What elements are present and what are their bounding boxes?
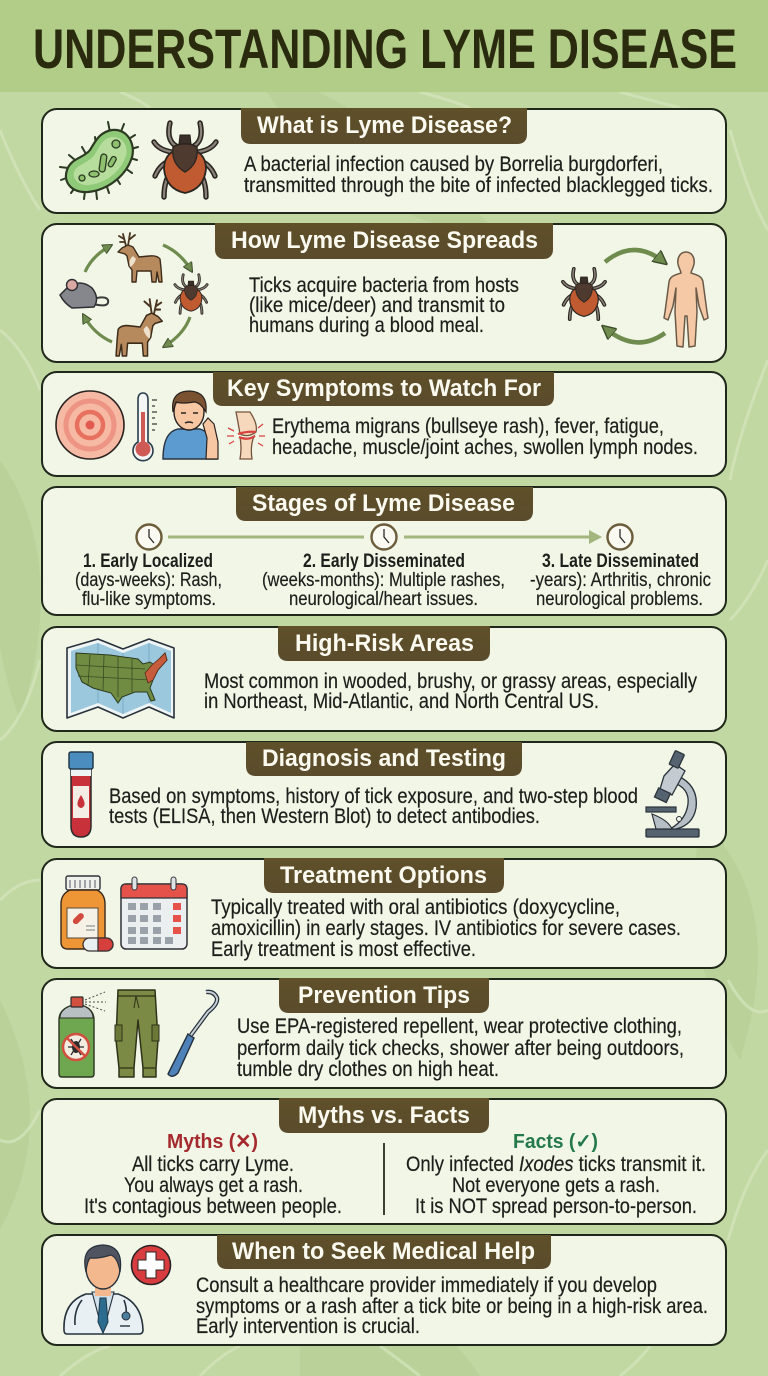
panel: Myths vs. Facts: [42, 1098, 726, 1224]
facts column: It is NOT spread person-to-person.: [415, 1195, 697, 1218]
text: transmission: (like mice/deer) and transmit to: [249, 294, 505, 317]
panel: What is Lyme Disease: [42, 108, 726, 213]
text: seek help: Early intervention is crucial.: [196, 1315, 420, 1338]
panel: How Lyme Disease Spreads: [42, 223, 726, 362]
icon: bullseye rash: [56, 391, 124, 459]
icon: clock 2: [372, 524, 396, 550]
heading pill: Prevention Tips: [298, 982, 470, 1009]
text: transmission: Ticks acquire bacteria from hosts: [249, 274, 519, 297]
title banner: [0, 0, 768, 92]
text: treatment: Typically treated with oral antibiotics (doxycycline,: [211, 896, 620, 919]
stage 3 text: -years): Arthritis, chronic: [530, 570, 711, 591]
text: seek help: Consult a healthcare provider immediately if you develop: [196, 1274, 657, 1297]
icon: medical cross: [132, 1246, 170, 1284]
panel: Treatment Options: [42, 858, 726, 968]
text: symptoms: [272, 415, 698, 459]
icon: person with headache: [163, 391, 218, 459]
heading pill: What is Lyme Disease?: [257, 112, 512, 139]
icon: deer bottom: [116, 299, 162, 356]
myths column: Myths (✕): [167, 1131, 258, 1153]
stage 2 text: neurological/heart issues.: [289, 589, 478, 610]
panel: Stages of Lyme Disease: [42, 487, 726, 615]
diagram: tick to human: [563, 250, 708, 347]
icon: tick: [154, 123, 216, 197]
icon: clock 1: [136, 524, 162, 550]
diagram: wildlife cycle: [60, 233, 207, 356]
icon: tick: [563, 269, 605, 319]
heading pill: High-Risk Areas: [295, 630, 474, 657]
arrows: exchange: [605, 250, 665, 342]
text: treatment: amoxicillin) in early stages. IV antibiotics for severe cases.: [211, 917, 681, 940]
myths column: It's contagious between people.: [84, 1195, 342, 1218]
icon: blood tube: [69, 752, 93, 837]
facts column: Not everyone gets a rash.: [452, 1174, 660, 1197]
icon: doctor: [64, 1245, 143, 1334]
text: prevention: Use EPA-registered repellent, wear protective clothing,: [237, 1015, 682, 1038]
text: definition: transmitted through the bite of infected blacklegged ticks.: [244, 174, 713, 197]
icon: cargo pants: [115, 990, 159, 1077]
panel: When to Seek Medical Help: [42, 1235, 726, 1345]
arrows: cycle: [84, 245, 191, 346]
heading pill: How Lyme Disease Spreads: [231, 227, 538, 254]
icon: tick remover tool: [168, 992, 217, 1076]
stage 3 text: neurological problems.: [536, 589, 703, 610]
panel: Prevention Tips: [42, 978, 726, 1088]
panel: Diagnosis and Testing: [42, 742, 726, 847]
divider: [383, 1143, 385, 1215]
icon: deer top: [118, 233, 162, 282]
heading pill: Stages of Lyme Disease: [252, 490, 515, 517]
stage 1 text: [75, 551, 222, 610]
icon: bacterium: [60, 122, 138, 199]
heading pill: [264, 858, 504, 893]
text: definition: [244, 153, 713, 197]
heading pill: Myths vs. Facts: [298, 1102, 470, 1129]
stage 3 text: [530, 551, 711, 610]
heading pill: Diagnosis and Testing: [262, 745, 506, 772]
heading pill: Key Symptoms to Watch For: [227, 375, 541, 402]
icon: clock 3: [608, 524, 632, 550]
text: transmission: humans during a blood meal.: [249, 314, 484, 337]
heading pill: [278, 626, 490, 661]
myths column: [84, 1131, 342, 1218]
panel: High-Risk Areas: [42, 626, 726, 731]
text: risk areas: Most common in wooded, brushy, or grassy areas, especially: [204, 670, 697, 693]
timeline arrow: [168, 530, 602, 544]
stage 2 text: (weeks-months): Multiple rashes,: [262, 570, 505, 591]
text: diagnosis: tests (ELISA, then Western Blot) to detect antibodies.: [109, 805, 540, 828]
stage 1 text: 1. Early Localized: [83, 551, 213, 572]
stage 2 text: [262, 551, 505, 610]
text: treatment: [211, 896, 681, 961]
heading pill: When to Seek Medical Help: [232, 1238, 535, 1265]
text: symptoms: headache, muscle/joint aches, swollen lymph nodes.: [272, 436, 698, 459]
text: definition: A bacterial infection caused by Borrelia burgdorferi,: [244, 153, 663, 176]
icon: microscope: [646, 751, 699, 837]
icon: knee joint: [227, 412, 265, 459]
facts column: Facts (✓): [513, 1131, 598, 1153]
facts column: Only infected Ixodes ticks transmit it.: [406, 1153, 706, 1176]
icon: thermometer: [133, 393, 157, 461]
stage 1 text: (days-weeks): Rash,: [75, 570, 222, 591]
facts column: [406, 1131, 706, 1218]
heading pill: Treatment Options: [280, 862, 487, 889]
text: seek help: [196, 1274, 708, 1338]
stage 3 text: 3. Late Disseminated: [542, 551, 699, 572]
text: risk areas: [204, 670, 697, 713]
icon: small tick: [175, 275, 207, 313]
text: transmission: [249, 274, 519, 337]
icon: capsule: [83, 938, 113, 951]
text: risk areas: in Northeast, Mid-Atlantic, and North Central US.: [204, 690, 599, 713]
myths column: You always get a rash.: [124, 1174, 303, 1197]
text: symptoms: Erythema migrans (bullseye rash), fever, fatigue,: [272, 415, 664, 438]
icon: repellent spray: [59, 992, 106, 1077]
stage 2 text: 2. Early Disseminated: [303, 551, 465, 572]
panel: Key Symptoms: [42, 372, 726, 476]
text: prevention: perform daily tick checks, shower after being outdoors,: [237, 1037, 684, 1060]
icon: mouse: [60, 280, 108, 308]
text: prevention: [237, 1015, 684, 1081]
stage 1 text: flu-like symptoms.: [82, 589, 216, 610]
text: seek help: symptoms or a rash after a tick bite or being in a high-risk area.: [196, 1295, 708, 1318]
heading pill: [279, 1098, 489, 1133]
text: treatment: Early treatment is most effective.: [211, 938, 476, 961]
heading pill: [279, 978, 489, 1013]
icon: human: [664, 252, 708, 347]
icon: US map: [67, 639, 174, 718]
heading pill: [241, 108, 527, 144]
text: diagnosis: [109, 785, 638, 828]
text: prevention: tumble dry clothes on high heat.: [237, 1058, 499, 1081]
icon: calendar: [121, 877, 187, 949]
text: diagnosis: Based on symptoms, history of tick exposure, and two-step blood: [109, 785, 638, 808]
icon: medicine bottle: [61, 876, 105, 949]
myths column: All ticks carry Lyme.: [132, 1153, 294, 1176]
